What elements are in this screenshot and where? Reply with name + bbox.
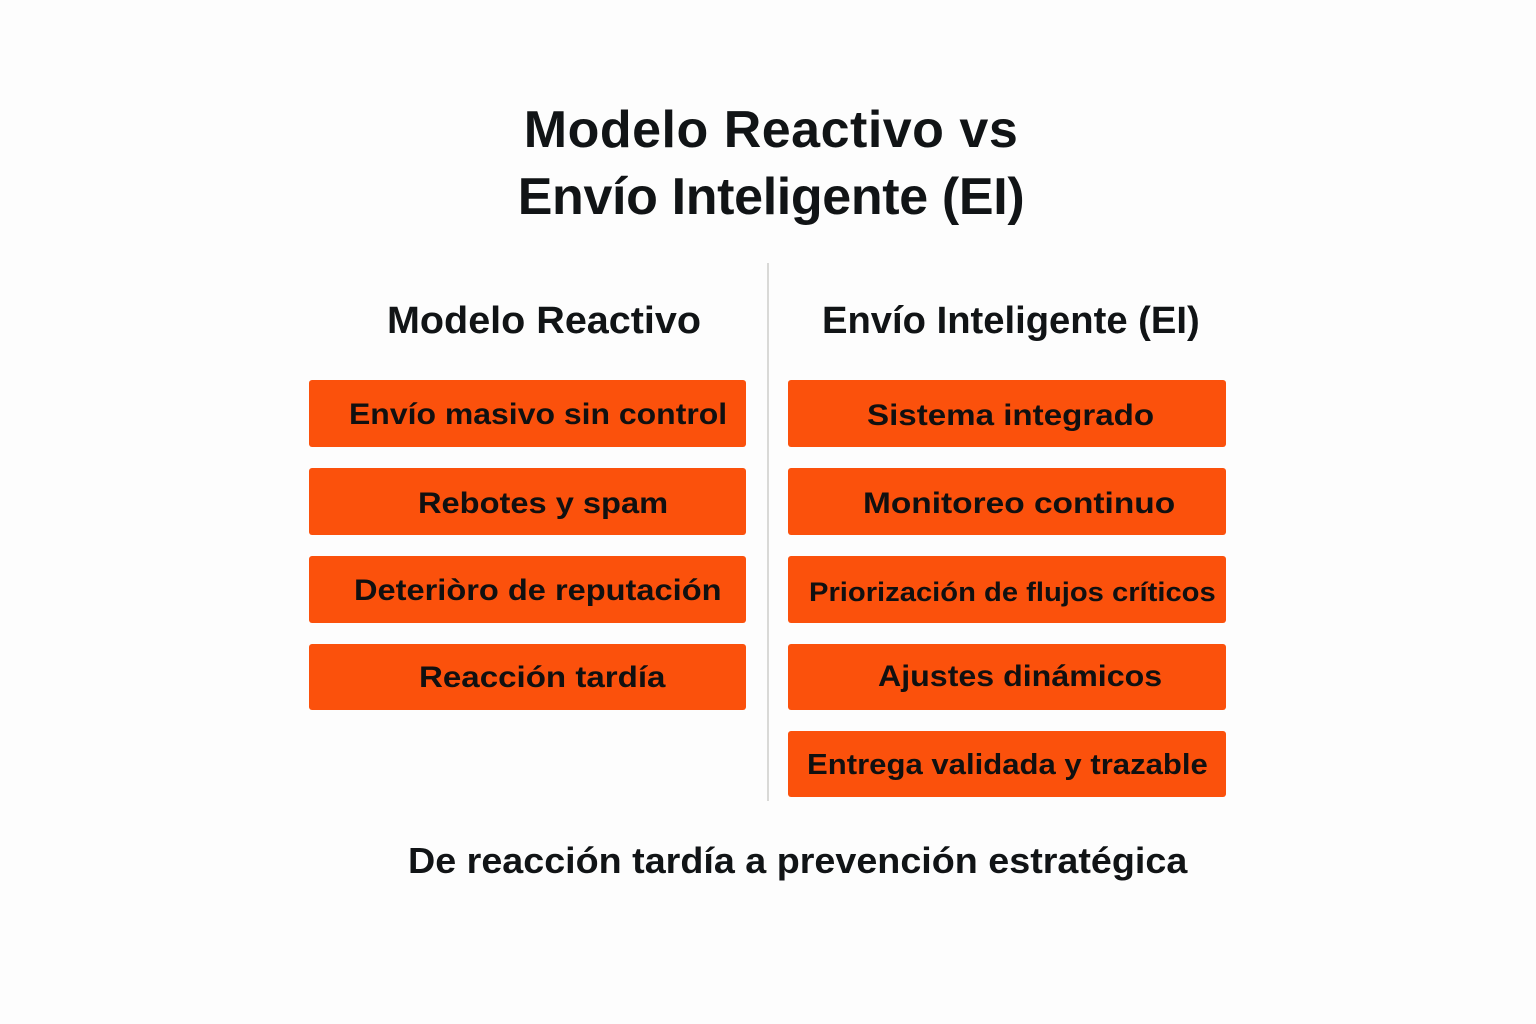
vertical divider bbox=[767, 263, 769, 801]
bar: Sistema integrado bbox=[788, 380, 1226, 447]
bar: Monitoreo continuo: Monitoreo continuo bbox=[863, 487, 1175, 520]
bar: Rebotes y spam bbox=[309, 468, 746, 535]
panel: left column bbox=[309, 380, 746, 710]
bar: Reacción tardía bbox=[309, 644, 746, 710]
heading: Envío Inteligente: Envío Inteligente (EI) bbox=[822, 300, 1200, 342]
closing statement: De reacción tardía a prevención estratégica bbox=[408, 840, 1187, 881]
bar: Entrega validada y trazable bbox=[788, 731, 1226, 797]
bar: Ajustes dinámicos: Ajustes dinámicos bbox=[878, 660, 1162, 693]
title bbox=[518, 101, 1024, 226]
heading: Modelo Reactivo: Modelo Reactivo bbox=[387, 300, 701, 342]
title: Modelo Reactivo vs bbox=[524, 101, 1018, 159]
bar: Priorización de flujos críticos bbox=[788, 556, 1226, 623]
bar: Sistema integrado: Sistema integrado bbox=[867, 399, 1154, 432]
bar: Deterioro de reputación bbox=[309, 556, 746, 623]
bar: Ajustes dinámicos bbox=[788, 644, 1226, 710]
panel: right column bbox=[788, 380, 1226, 797]
bar: Deterioro de reputación: Deteriòro de reputación bbox=[354, 574, 722, 607]
bar: Priorización de flujos críticos: Priorización de flujos críticos bbox=[809, 577, 1216, 607]
bar: Rebotes y spam: Rebotes y spam bbox=[418, 487, 668, 520]
bar: Envío masivo sin control bbox=[309, 380, 746, 447]
bar: Entrega validada y trazable: Entrega validada y trazable bbox=[807, 749, 1208, 781]
bar: Envío masivo sin control: Envío masivo sin control bbox=[349, 398, 727, 431]
bar: Monitoreo continuo bbox=[788, 468, 1226, 535]
bar: Reacción tardía: Reacción tardía bbox=[419, 661, 665, 694]
title: Envío Inteligente (EI) bbox=[518, 168, 1024, 226]
